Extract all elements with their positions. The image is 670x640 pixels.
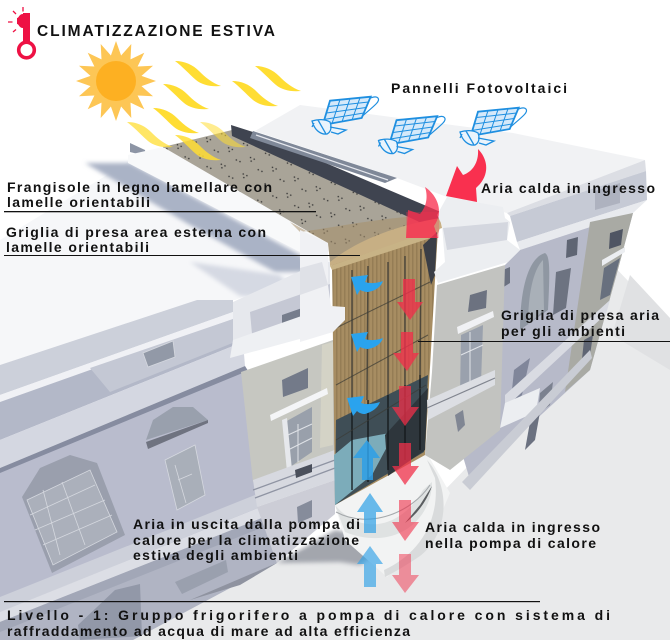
right wing stone pier [565, 213, 633, 392]
footer note: raffraddamento ad acqua di mare ad alta efficienza [7, 623, 410, 639]
sun [76, 41, 156, 121]
label: aria calda pompa [425, 519, 600, 551]
arrow: hot air entering atrium [406, 187, 439, 238]
label: aria in uscita: calore per la climatizzazione [133, 532, 359, 548]
footer note [4, 601, 610, 639]
pier windows [282, 368, 308, 397]
left wing roof [0, 143, 335, 365]
left wall windows [22, 341, 228, 640]
ground plane [130, 262, 670, 640]
right wing of the building [255, 105, 647, 490]
label: frangisole [4, 179, 316, 212]
label: aria in uscita: estiva degli ambienti [133, 547, 298, 563]
label: aria calda in ingresso: Aria calda in ingresso [481, 180, 655, 196]
red downward air arrows [392, 279, 423, 593]
white parapet [128, 147, 328, 252]
ground shadow and steps [277, 450, 450, 577]
central left cornice block [300, 230, 345, 342]
dark ridge strip [231, 125, 443, 230]
label: aria in uscita [133, 516, 360, 563]
label: griglia ambienti: Griglia di presa aria [501, 307, 659, 323]
label: griglia esterna [4, 224, 360, 256]
left pier [230, 262, 345, 563]
label: griglia esterna: Griglia di presa area esterna con [6, 224, 266, 240]
label: aria calda pompa: Aria calda in ingresso [425, 519, 600, 535]
frangisole roof with oriented slats [163, 125, 443, 262]
arched header over atrium [330, 218, 442, 266]
label: frangisole: lamelle orientabili [7, 194, 150, 210]
icon: thermometer [8, 7, 34, 58]
label: frangisole: Frangisole in legno lamellare con [7, 179, 272, 195]
icons: solar panels [312, 97, 526, 154]
label: aria in uscita: Aria in uscita dalla pompa di [133, 516, 360, 532]
footer note: Livello - 1: Gruppo frigorifero a pompa di calore con sistema di [7, 607, 610, 623]
central right pier [425, 197, 520, 470]
label: griglia esterna: lamelle orientabili [6, 239, 149, 255]
arrow: hot air inlet [446, 149, 486, 202]
blue upward air arrows [353, 440, 383, 587]
title: CLIMATIZZAZIONE ESTIVA [37, 23, 275, 40]
right wing windows [502, 229, 625, 450]
label: griglia ambienti [418, 307, 670, 342]
label: aria calda pompa: nella pompa di calore [425, 535, 596, 551]
left wall [0, 341, 277, 640]
blue curved air outlets [347, 275, 383, 416]
roof shadow [85, 163, 325, 272]
solar heat waves [127, 61, 301, 160]
label: griglia ambienti: per gli ambienti [501, 323, 625, 339]
atrium glazed facade [330, 218, 442, 505]
upper left wall bands [0, 300, 250, 475]
label: pannelli fotovoltaici: Pannelli Fotovoltaici [391, 80, 567, 96]
